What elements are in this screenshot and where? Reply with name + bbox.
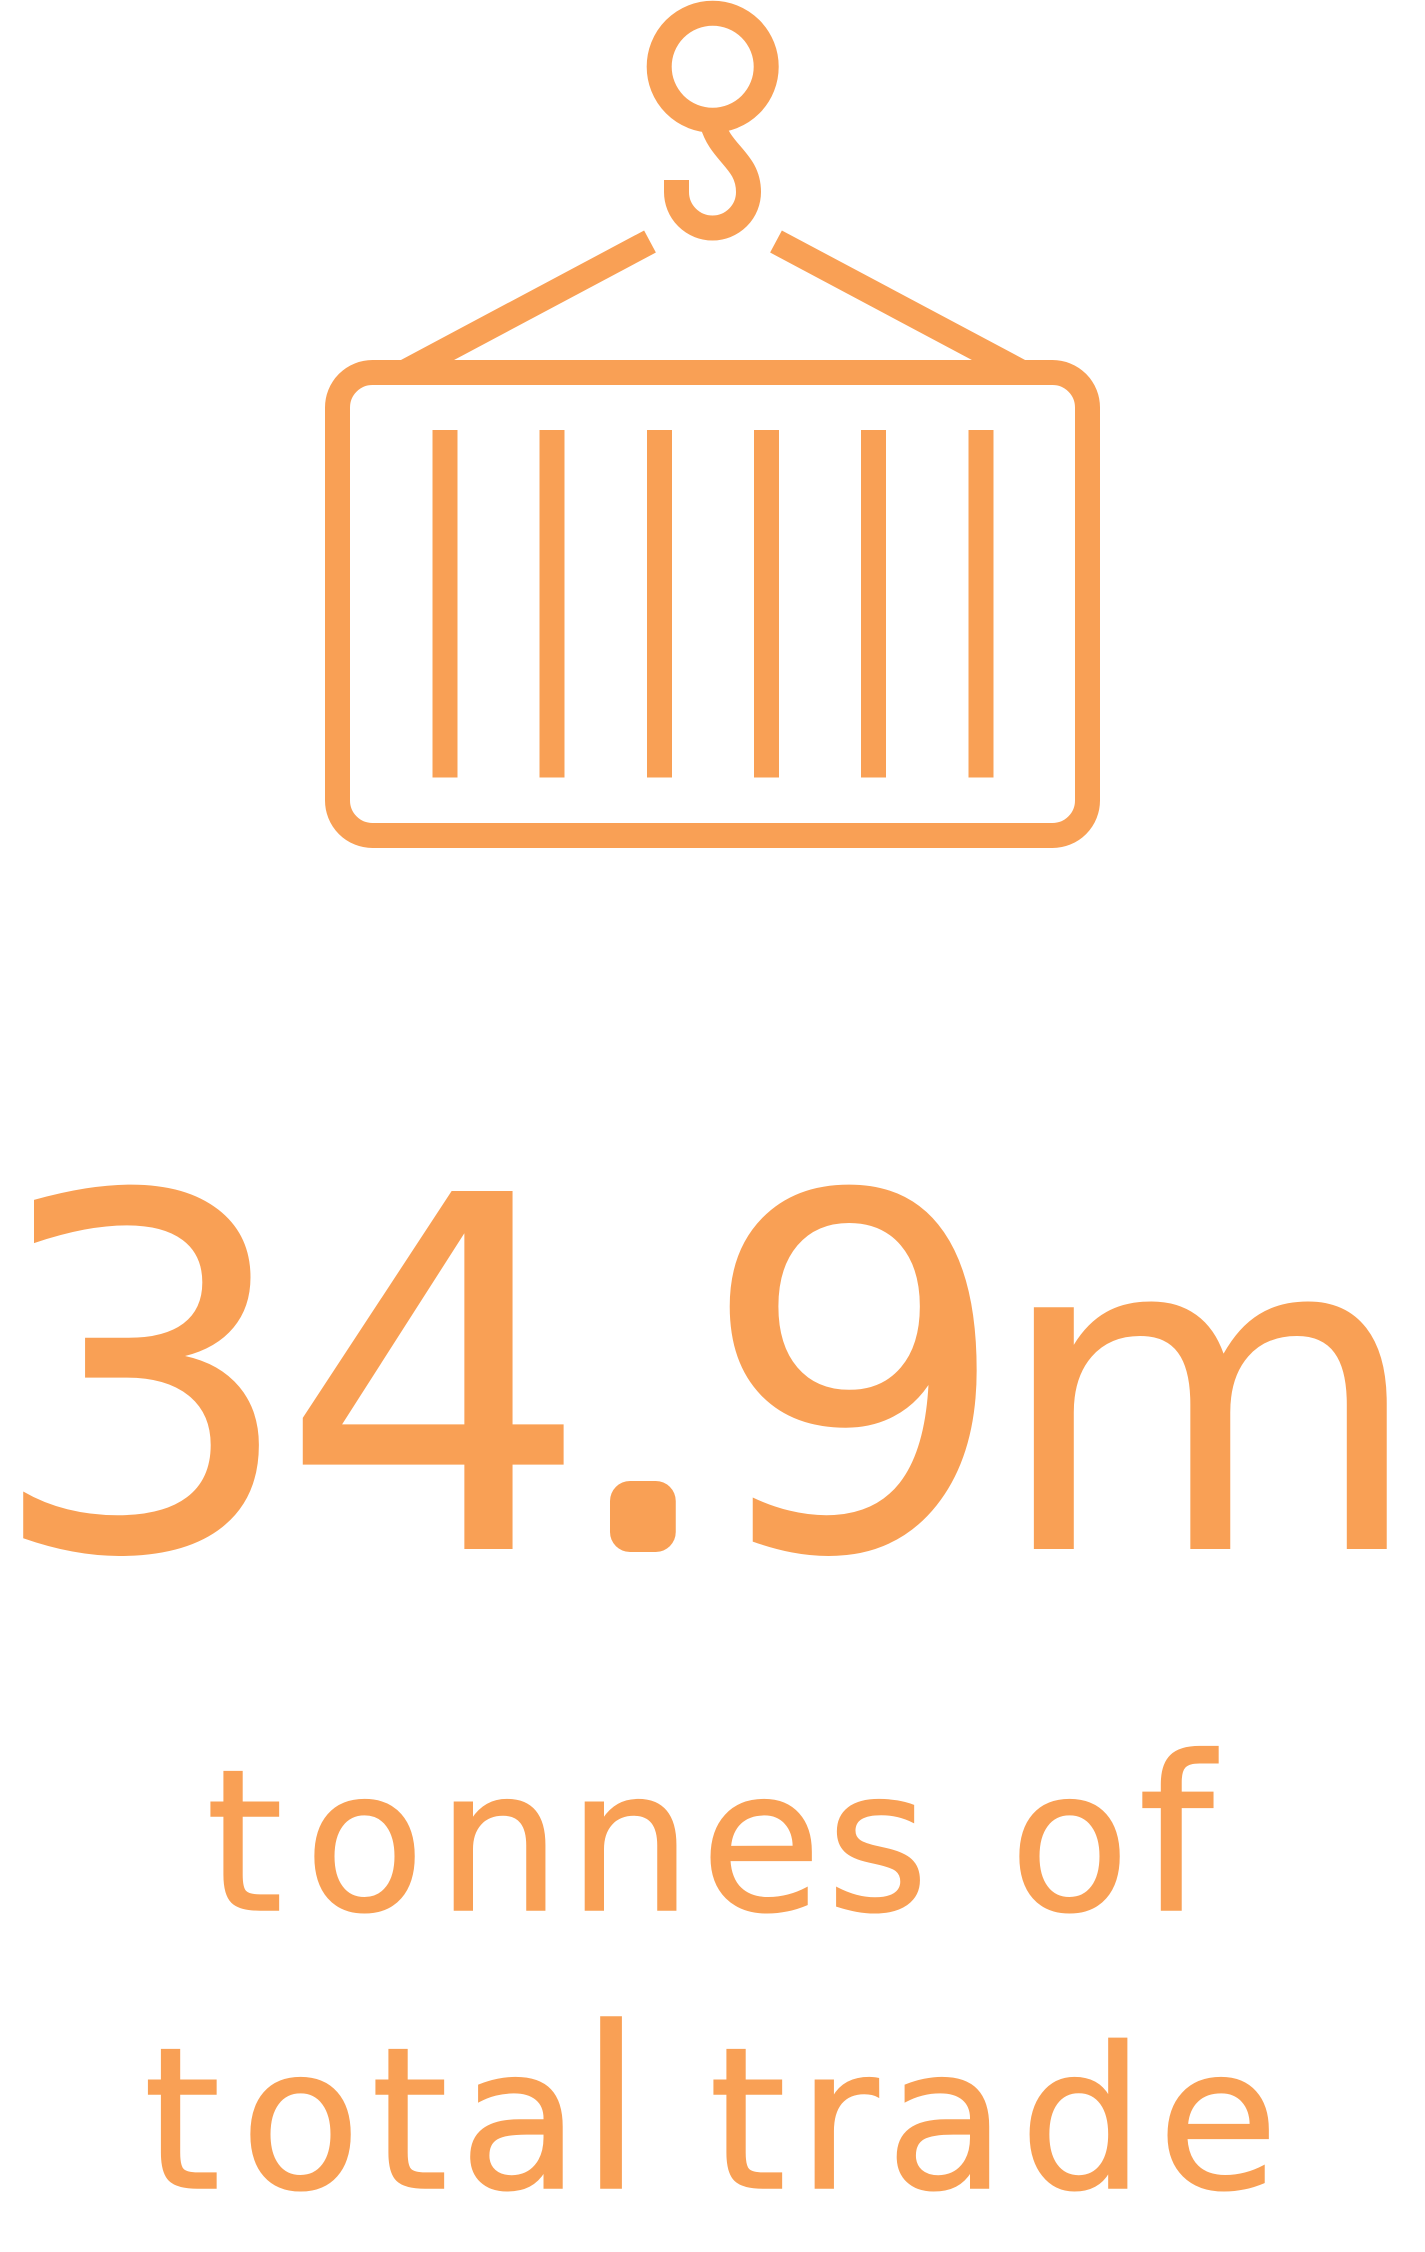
icon: shipping container on crane hook bbox=[338, 13, 1088, 835]
icon: crane hook bbox=[676, 122, 748, 228]
caption line 2: trade bbox=[649, 2006, 1279, 2235]
headline number: . bbox=[603, 1300, 683, 1591]
headline number: m bbox=[994, 1140, 1424, 1654]
icon: right sling bbox=[776, 242, 1022, 372]
headline number: 4 bbox=[279, 1093, 591, 1665]
icon: container body bbox=[338, 372, 1088, 836]
caption line 1: f bbox=[1138, 1710, 1218, 1961]
headline number: 9 bbox=[699, 1093, 1011, 1665]
caption line 2: l bbox=[580, 1980, 642, 2242]
caption line 2: tota bbox=[143, 2006, 580, 2235]
icon: left sling bbox=[404, 242, 650, 372]
icon: container ribs bbox=[432, 430, 994, 778]
caption line 1: tonnes o bbox=[206, 1728, 1130, 1957]
icon: crane ring bbox=[659, 13, 766, 120]
